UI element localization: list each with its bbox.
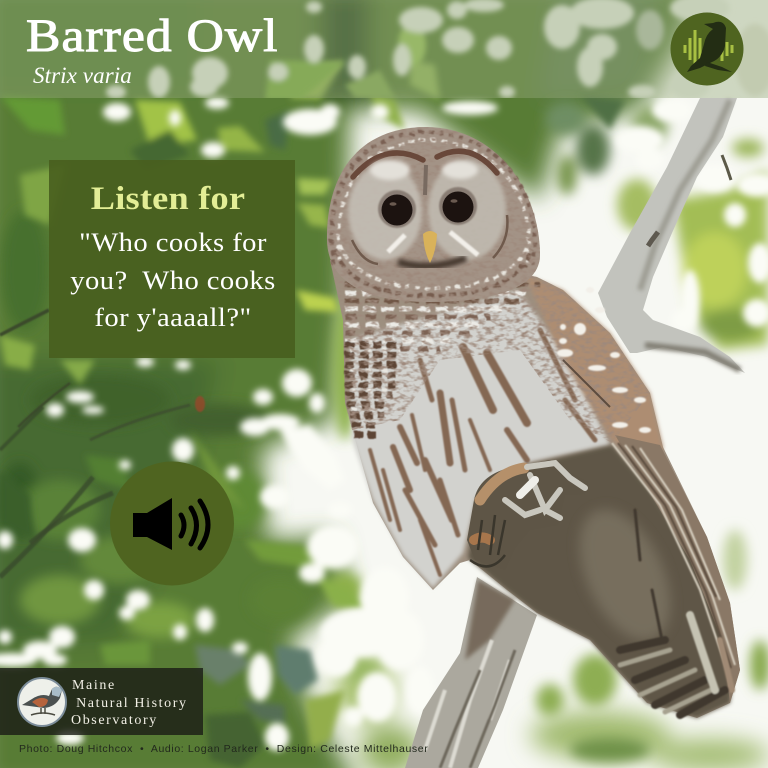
belly — [350, 290, 610, 588]
owl body — [330, 255, 740, 718]
primaries — [615, 435, 740, 703]
owl talons — [467, 460, 588, 570]
credits: Photo: Doug Hitchcox • Audio: Logan Parker • Design: Celeste Mittelhauser — [19, 743, 428, 755]
logo text: Maine — [72, 678, 116, 693]
top title band — [0, 0, 768, 98]
wing coverts — [525, 275, 663, 470]
wing spots — [557, 287, 651, 433]
panel: listen for — [49, 160, 295, 358]
logo text: Observatory — [71, 713, 158, 728]
mottled breast — [345, 285, 540, 435]
owl beak — [423, 231, 437, 263]
band foliage highlights — [103, 0, 768, 98]
logo text: Natural History — [76, 696, 188, 710]
body mottling texture — [331, 266, 644, 442]
head mottling texture — [325, 125, 545, 305]
owl — [320, 125, 740, 718]
belly streaks — [370, 330, 595, 575]
heading: listen for: Listen for — [91, 181, 245, 217]
owl eyes — [378, 187, 477, 228]
title: Barred Owl — [26, 10, 279, 62]
logo text — [71, 678, 188, 728]
logo panel — [0, 668, 203, 735]
call description: "Who cooks for — [79, 228, 267, 257]
tail bars — [620, 510, 732, 715]
scientific name: Strix varia — [33, 63, 132, 88]
call description — [70, 228, 276, 332]
underside and tail — [468, 445, 735, 718]
icon: bird with sound wave badge — [670, 12, 744, 86]
logo: observatory bird badge — [17, 677, 67, 727]
icon: speaker audio button — [110, 462, 234, 586]
call description: for y'aaaall?" — [94, 303, 252, 332]
call description: you? Who cooks — [70, 266, 276, 294]
tree branch — [405, 98, 745, 768]
owl head — [325, 125, 545, 305]
